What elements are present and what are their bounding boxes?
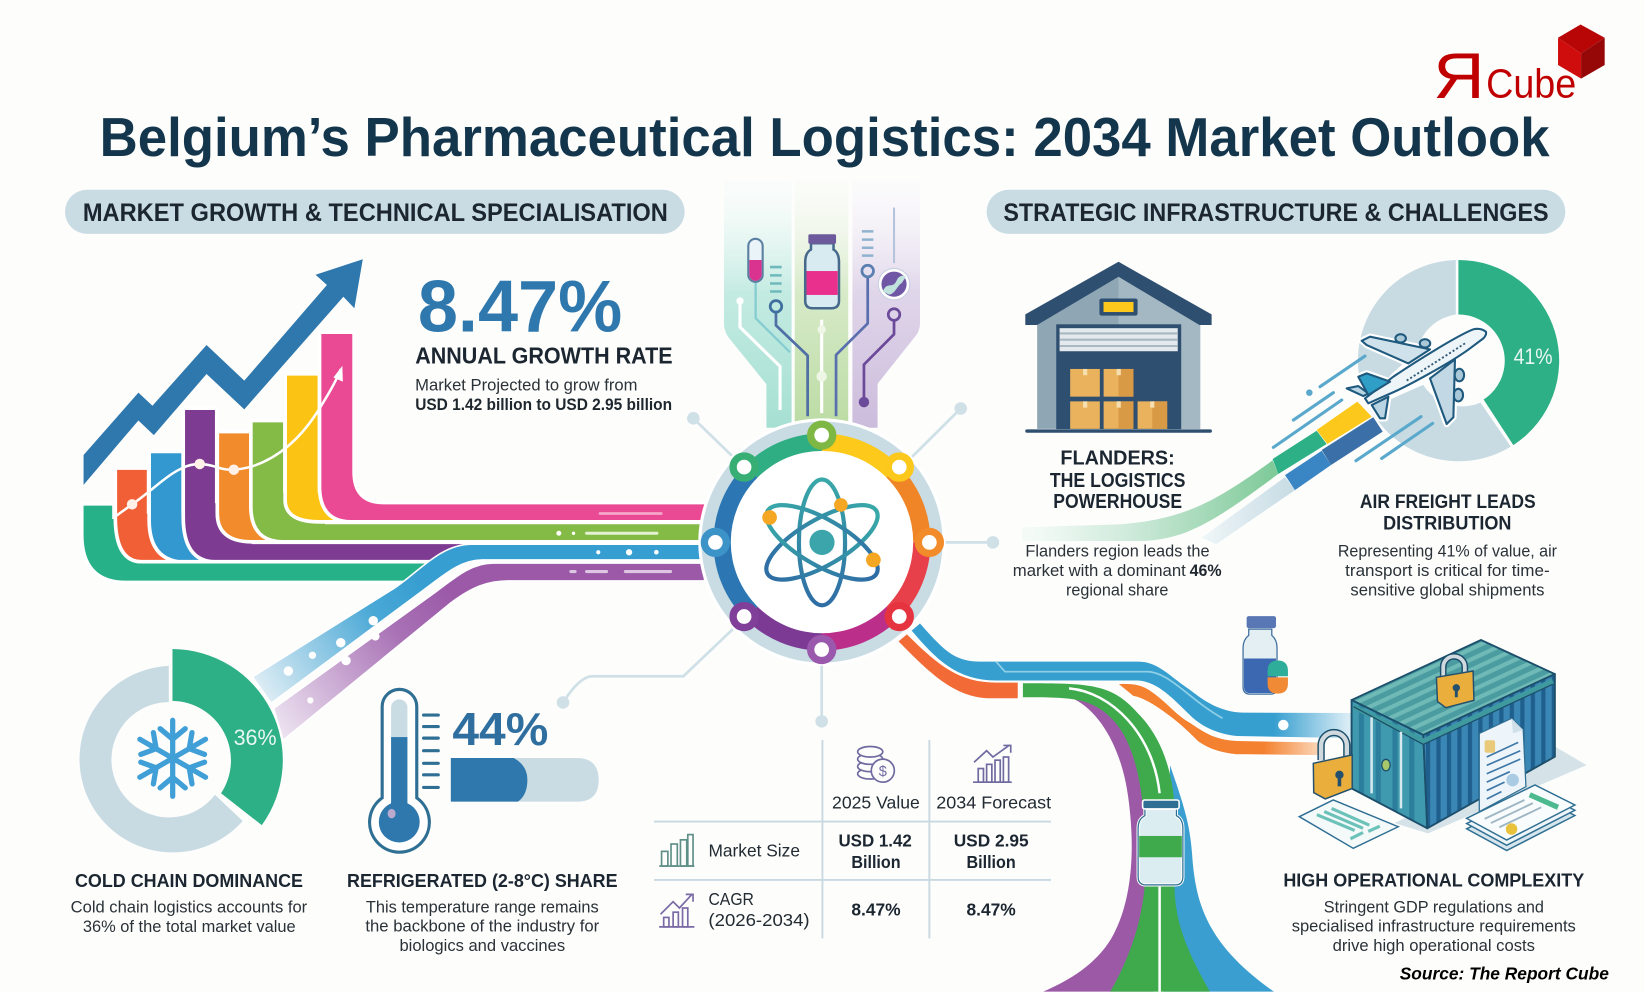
section heading: strategic infrastructure: [987, 190, 1565, 234]
air freight heading: DISTRIBUTION: [1383, 512, 1511, 534]
section heading: strategic infrastructure: STRATEGIC INFRASTRUCTURE & CHALLENGES: [1003, 199, 1549, 227]
icon: document stack: [1467, 785, 1575, 851]
flanders heading: POWERHOUSE: [1053, 491, 1182, 513]
air freight text: Representing 41% of value, air: [1338, 543, 1558, 561]
values: USD 2.95: [954, 831, 1029, 851]
values: Billion: [966, 852, 1016, 872]
values: 8.47%: [966, 899, 1016, 919]
teal ribbon: [724, 180, 792, 428]
stat 44%: 44%: [452, 703, 548, 755]
panel: cold chain donut: [71, 649, 308, 936]
values: USD 1.42: [838, 831, 912, 851]
icon: atom: [756, 479, 888, 605]
stat: annual growth rate: ANNUAL GROWTH RATE: [415, 342, 673, 368]
central hub: [557, 402, 999, 728]
flanders text: market with a dominant: [1013, 562, 1186, 580]
refrigerated heading: REFRIGERATED (2-8°C) SHARE: [347, 870, 618, 891]
column headers: 2025 Value: [832, 792, 920, 812]
blue stream: [1164, 765, 1274, 992]
cold chain text: Cold chain logistics accounts for: [71, 899, 308, 917]
icon: forecast chart: [973, 745, 1012, 782]
air freight heading: [1360, 491, 1536, 534]
complexity heading: HIGH OPERATIONAL COMPLEXITY: [1283, 870, 1585, 891]
icon: left padlock: [1313, 733, 1352, 799]
label: Market Size: [708, 841, 800, 861]
trend line with points: [115, 366, 343, 517]
icon: bottle on stream: [1138, 800, 1183, 885]
blue route to container: [912, 624, 1353, 738]
icon: vial: [805, 234, 839, 308]
icon: coins: $: [879, 764, 887, 780]
flanders heading: THE LOGISTICS: [1050, 470, 1185, 492]
refrigerated text: [365, 899, 600, 955]
complexity text: drive high operational costs: [1333, 937, 1535, 955]
purple stream: [1043, 699, 1153, 992]
green stream: [1023, 683, 1210, 992]
air freight text: transport is critical for time-: [1345, 562, 1550, 580]
icon: thermometer: [370, 689, 438, 852]
flight ribbons: [1022, 402, 1383, 544]
ribbon bars: [84, 334, 705, 581]
air freight heading: AIR FREIGHT LEADS: [1360, 491, 1536, 513]
stat: annual growth rate: 8.47%: [418, 265, 622, 347]
cold chain text: 36% of the total market value: [83, 918, 296, 936]
label: [708, 889, 810, 930]
icon: warehouse: [1025, 262, 1212, 433]
panel: flanders: [1013, 262, 1222, 600]
spokes: [557, 402, 999, 728]
label: (2026-2034): [708, 910, 810, 930]
complexity text: [1292, 899, 1576, 955]
row: CAGR: [659, 889, 1016, 930]
growth chart: arrow and ribbon bars: [84, 259, 705, 581]
cold chain heading: COLD CHAIN DOMINANCE: [75, 870, 303, 891]
refrigerated text: This temperature range remains: [366, 899, 599, 917]
lime ribbon: [795, 180, 848, 421]
icon: paper sheet: [1299, 800, 1398, 848]
title: Belgium’s Pharmaceutical Logistics: 2034 Market Outlook: [100, 107, 1550, 168]
values: Billion: [851, 852, 901, 872]
stat: annual growth rate: Market Projected to grow from: [415, 377, 637, 395]
donut chart 41%: [1358, 260, 1559, 461]
panel: refrigerated share: [347, 689, 618, 955]
icon: container: [1352, 640, 1587, 833]
air freight text: sensitive global shipments: [1350, 582, 1544, 600]
icon: top padlock: [1436, 656, 1474, 708]
zigzag growth arrow: [84, 259, 363, 485]
row: market size: [659, 831, 1029, 872]
column headers: [832, 792, 1051, 812]
hub ring: [698, 418, 946, 666]
icon: capsule: [748, 239, 763, 282]
table lines: [654, 740, 1051, 938]
section heading: market growth: MARKET GROWTH & TECHNICAL SPECIALISATION: [83, 199, 668, 227]
flanders text: regional share: [1066, 582, 1168, 600]
flanders text: 46%: [1190, 562, 1222, 580]
refrigerated text: the backbone of the industry for: [365, 918, 600, 936]
stat: annual growth rate: [415, 265, 673, 414]
values: [851, 899, 1016, 919]
flanders heading: FLANDERS:: [1060, 447, 1175, 469]
stat: annual growth rate: USD 1.42 billion to USD 2.95 billion: [415, 396, 672, 414]
progress bar: [451, 758, 599, 802]
top pharma ribbons: [724, 180, 920, 428]
icon: bars: [659, 835, 694, 866]
cold chain text: [71, 899, 308, 936]
logo: RCube: Cube: [1486, 61, 1576, 107]
lower right flow ribbons: [899, 624, 1353, 992]
label: CAGR: [708, 889, 754, 909]
section heading: market growth: [65, 190, 685, 234]
icon: snowflake: [134, 720, 212, 796]
icon: pill disc: [878, 268, 910, 300]
donut chart 36%: [80, 649, 283, 852]
air freight text: [1338, 543, 1558, 600]
flanders heading: [1050, 447, 1185, 513]
icon: growth: [659, 894, 694, 927]
panel: high operational complexity: [1283, 640, 1587, 955]
donut chart 36%: 36%: [234, 725, 277, 750]
flanders text: [1013, 543, 1222, 600]
source note: Source: The Report Cube: [1400, 963, 1609, 983]
icon: small vial with pill: [1243, 616, 1288, 694]
logo: RCube: Я: [1433, 39, 1485, 112]
speed lines: [1273, 356, 1433, 461]
logo: RCube: [1433, 25, 1605, 112]
icon: document: [1479, 718, 1526, 812]
values: 8.47%: [851, 899, 901, 919]
circuit lines: [736, 208, 900, 416]
orange route to container: [1117, 683, 1323, 756]
column headers: 2034 Forecast: [936, 792, 1051, 812]
values: [838, 831, 1029, 872]
icon: airplane: [1347, 329, 1486, 424]
market data table: [654, 740, 1051, 938]
donut chart 41%: 41%: [1514, 344, 1553, 369]
diagonal blue and purple ribbons: [252, 512, 705, 740]
complexity text: specialised infrastructure requirements: [1292, 918, 1576, 936]
lilac ribbon: [852, 180, 920, 428]
panel: air freight: [1022, 260, 1559, 600]
refrigerated text: biologics and vaccines: [399, 937, 565, 955]
flanders text: Flanders region leads the: [1025, 543, 1210, 561]
complexity text: Stringent GDP regulations and: [1324, 899, 1544, 917]
icon: coins: [858, 747, 894, 782]
red-orange start: [899, 634, 1018, 698]
